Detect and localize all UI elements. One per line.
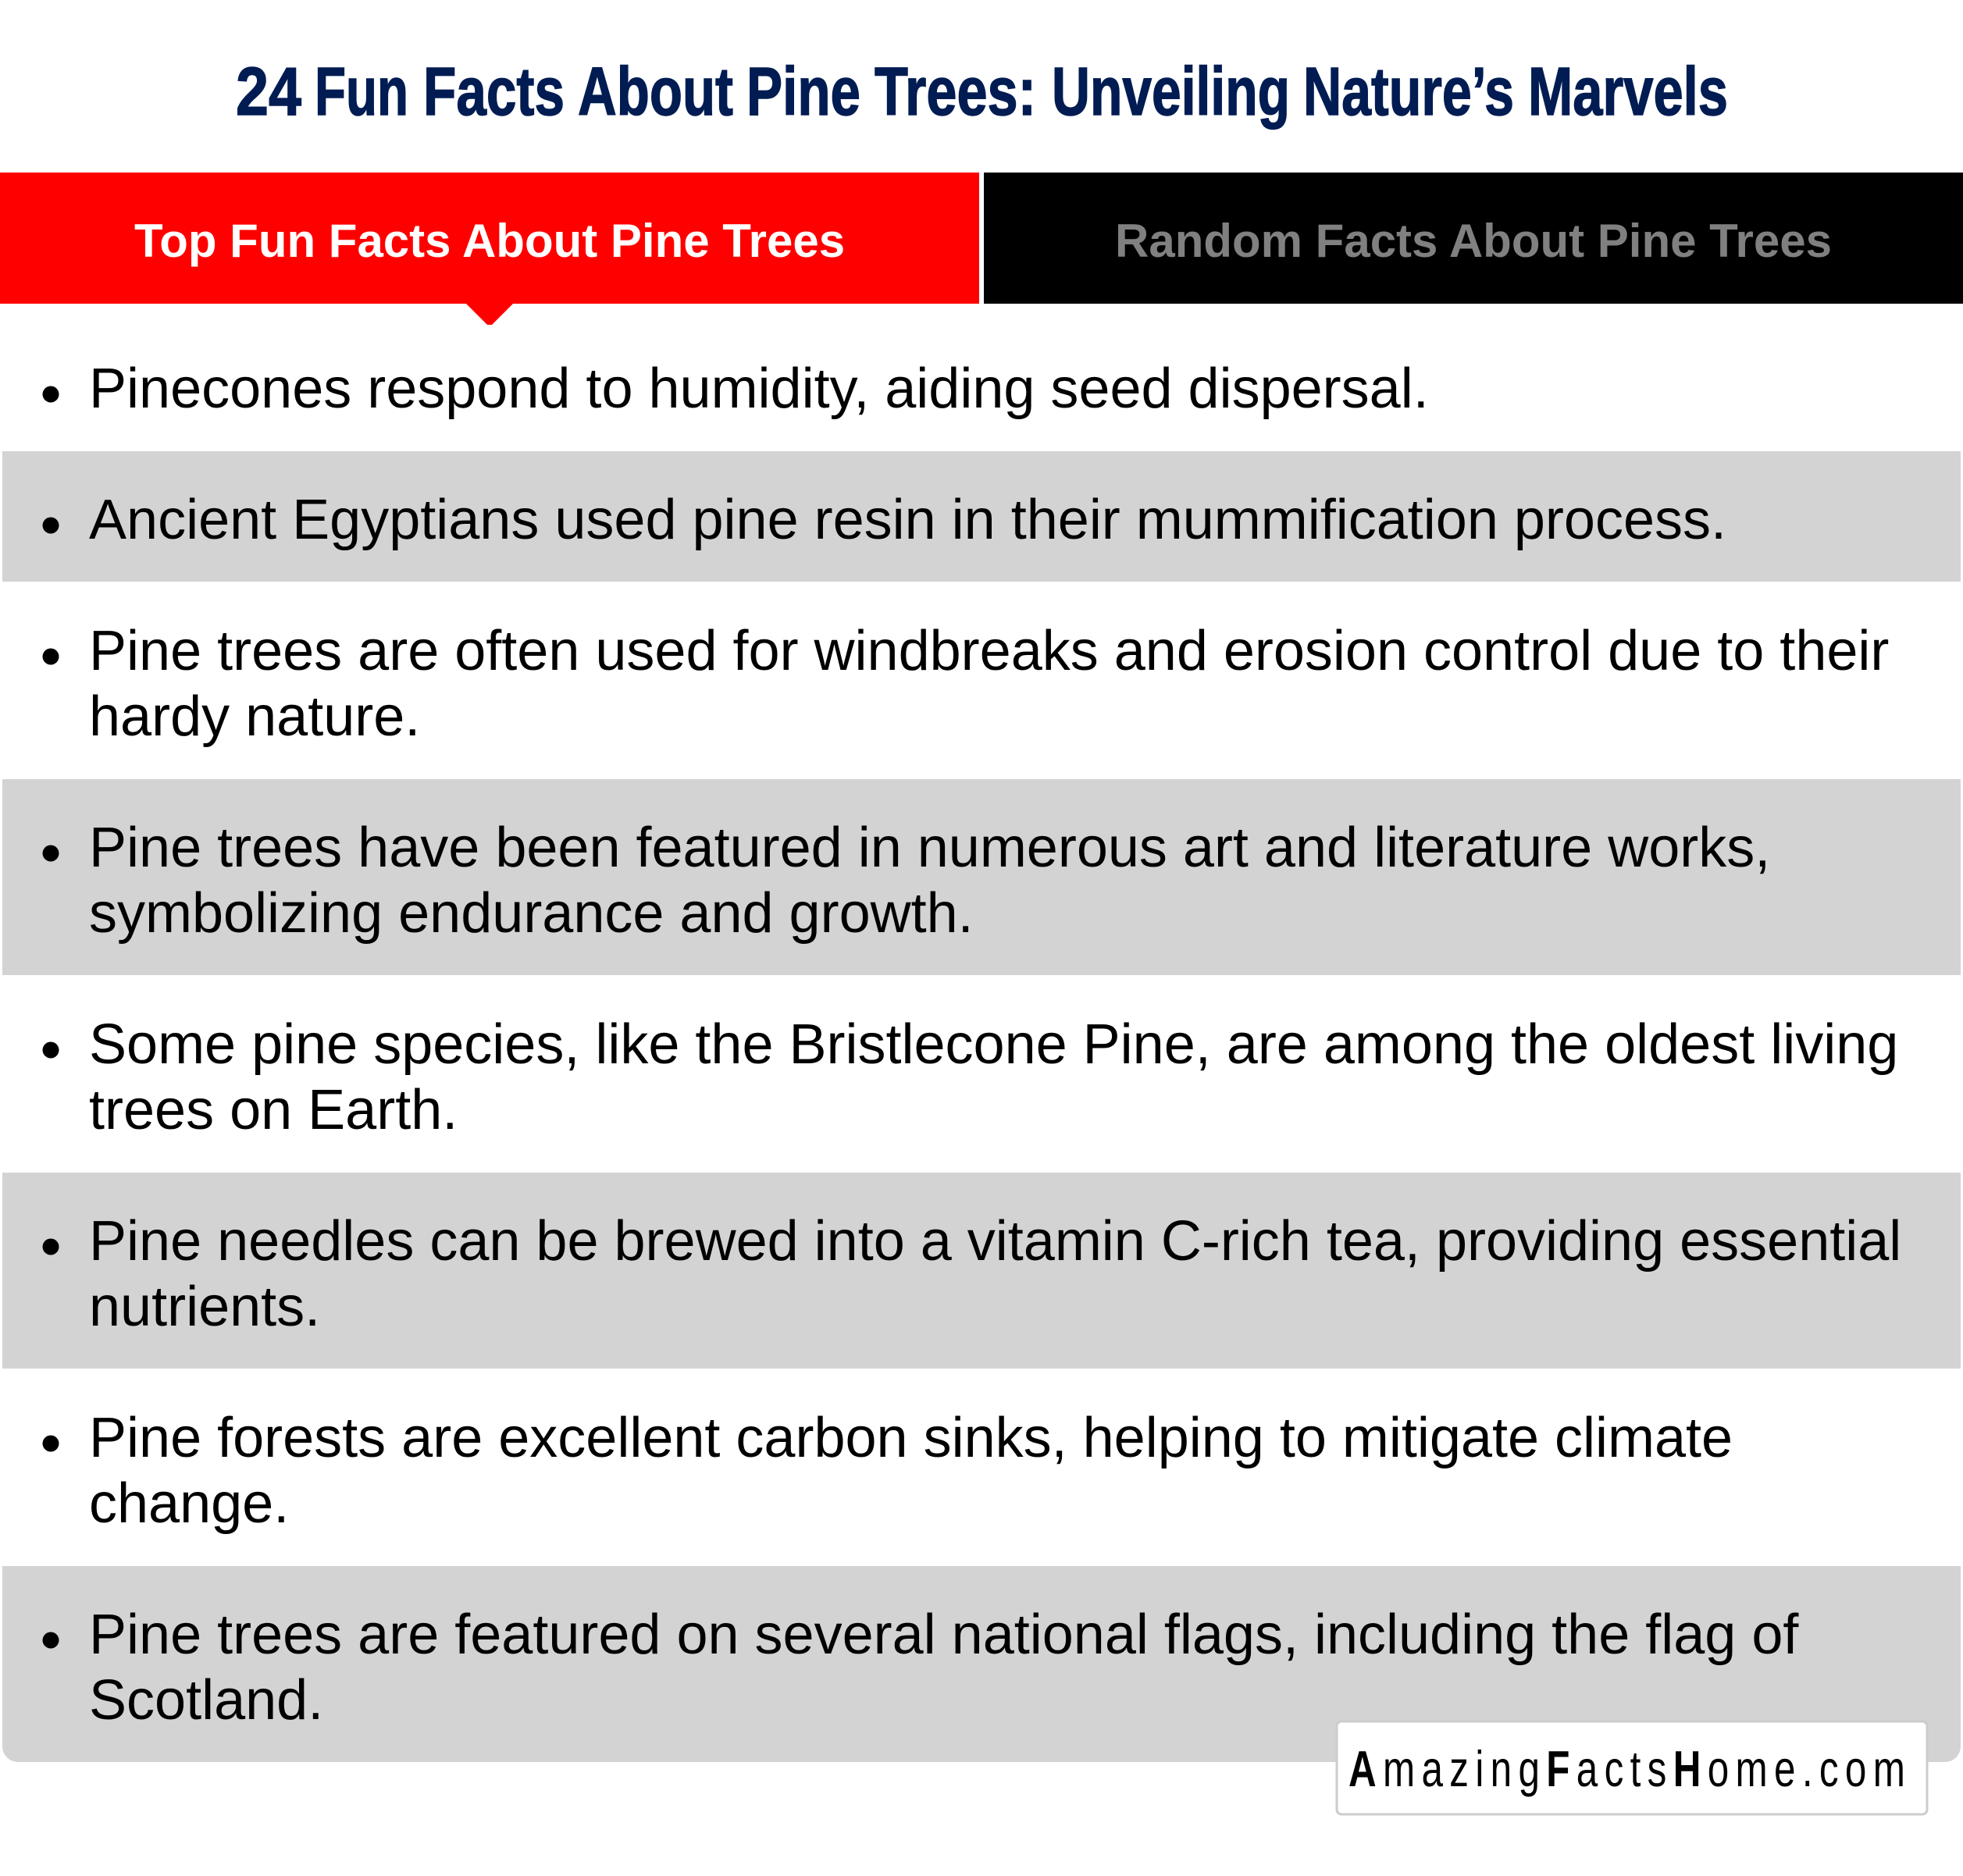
tab: random facts (inactive) <box>984 173 1963 304</box>
title: Nature’s <box>1303 54 1514 130</box>
title: Unveiling <box>1052 54 1290 130</box>
title: About <box>578 54 733 130</box>
fact row 6: Pine needles can be brewed into a vitamin C-rich tea, providing essential <box>89 1210 1901 1273</box>
fact row 2 <box>2 451 1961 582</box>
fact row 4: symbolizing endurance and growth. <box>89 882 974 945</box>
title: Pine <box>746 54 860 130</box>
tab: top fun facts (active): Top Fun Facts About Pine Trees <box>134 215 845 267</box>
title: Facts <box>423 54 565 130</box>
fact row 7: change. <box>89 1472 289 1535</box>
fact row 8 <box>2 1566 1961 1762</box>
fact row 3: Pine trees are often used for windbreaks and erosion control due to their <box>89 620 1889 682</box>
fact row 7 <box>42 1407 1733 1535</box>
fact row 5: Some pine species, like the Bristlecone Pine, are among the oldest living <box>89 1013 1898 1076</box>
title <box>236 54 1728 130</box>
watermark: AmazingFactsHome.com: AmazingFactsHome.com <box>1348 1742 1905 1798</box>
tab: top fun facts (active) <box>0 173 979 325</box>
fact row 5 <box>42 1013 1898 1141</box>
fact row 3: hardy nature. <box>89 685 420 748</box>
fact row 4 <box>2 779 1961 975</box>
fact row 2: Ancient Egyptians used pine resin in their mummification process. <box>89 489 1726 551</box>
watermark: AmazingFactsHome.com <box>1337 1721 1927 1814</box>
title: Marvels <box>1528 54 1728 130</box>
fact row 3 <box>42 620 1889 748</box>
title: Fun <box>315 54 408 130</box>
fact row 5: trees on Earth. <box>89 1079 458 1141</box>
fact row 6: nutrients. <box>89 1276 320 1338</box>
fact row 8: Pine trees are featured on several national flags, including the flag of <box>89 1604 1799 1666</box>
fact row 4: Pine trees have been featured in numerous art and literature works, <box>89 817 1770 879</box>
tab: random facts (inactive): Random Facts About Pine Trees <box>1115 215 1832 267</box>
title: 24 <box>236 54 301 130</box>
fact row 7: Pine forests are excellent carbon sinks, helping to mitigate climate <box>89 1407 1733 1469</box>
fact row 8: Scotland. <box>89 1669 323 1732</box>
fact row 1: Pinecones respond to humidity, aiding seed dispersal. <box>89 358 1429 420</box>
fact row 6 <box>2 1173 1961 1369</box>
title: Trees: <box>875 54 1036 130</box>
